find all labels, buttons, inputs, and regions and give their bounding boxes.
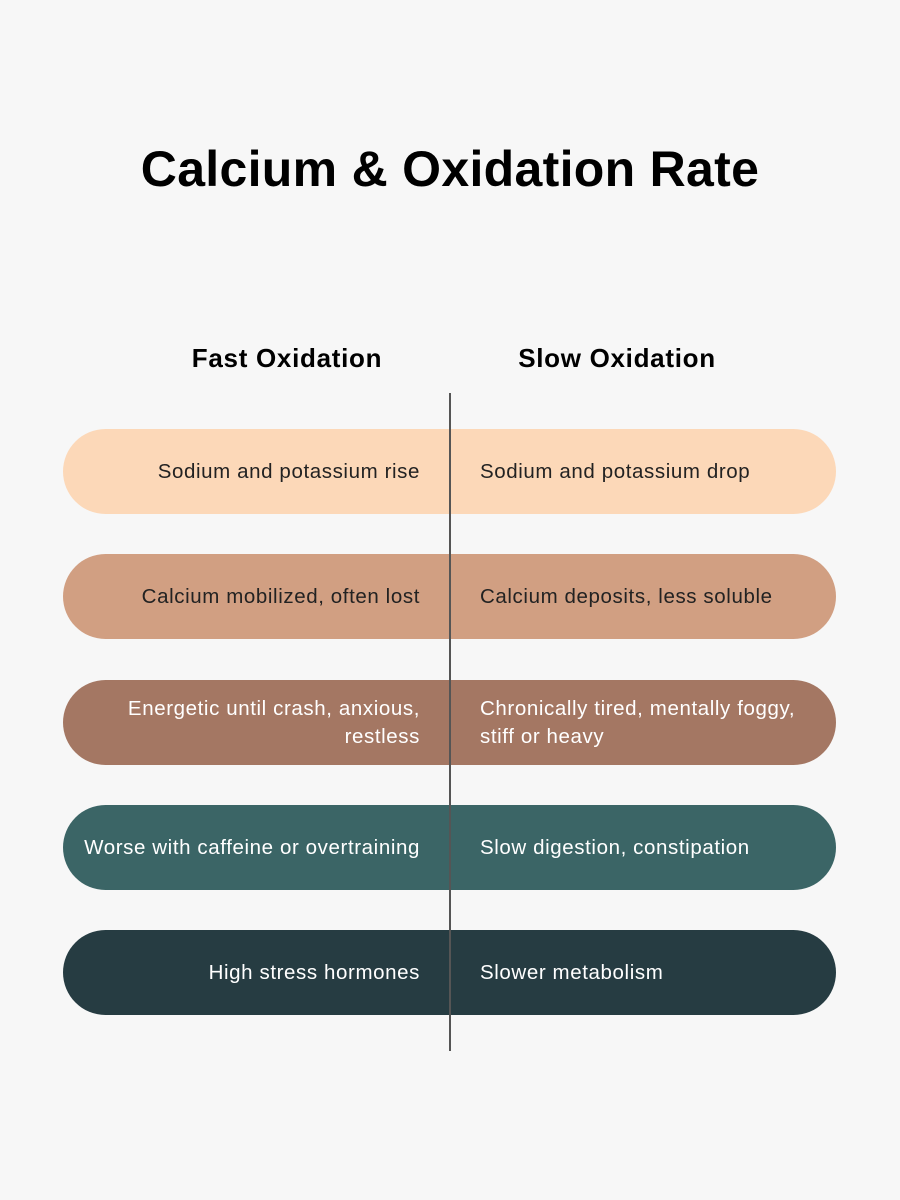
row 3 — [63, 680, 836, 765]
row 1: Sodium and potassium drop — [480, 460, 750, 482]
row 2: Calcium mobilized, often lost — [142, 584, 420, 608]
title: Calcium & Oxidation Rate — [141, 141, 759, 197]
row 4: Slow digestion, constipation — [480, 836, 750, 858]
row 5: Slower metabolism — [480, 960, 663, 984]
heading: slow oxidation: Slow Oxidation — [518, 343, 716, 373]
row 5: High stress hormones — [209, 960, 420, 984]
row 4: Worse with caffeine or overtraining — [84, 836, 420, 858]
row 3: Chronically tired, mentally foggy, — [480, 696, 795, 720]
heading: fast oxidation: Fast Oxidation — [192, 343, 382, 373]
row 2 — [63, 554, 836, 639]
row 3: Energetic until crash, anxious, — [128, 696, 420, 720]
row 3: stiff or heavy — [480, 724, 604, 748]
row 2: Calcium deposits, less soluble — [480, 584, 773, 608]
row 4 — [63, 805, 836, 890]
row 5 — [63, 930, 836, 1015]
row 1 — [63, 429, 836, 514]
row 1: Sodium and potassium rise — [158, 460, 420, 482]
row 3: restless — [345, 724, 420, 748]
